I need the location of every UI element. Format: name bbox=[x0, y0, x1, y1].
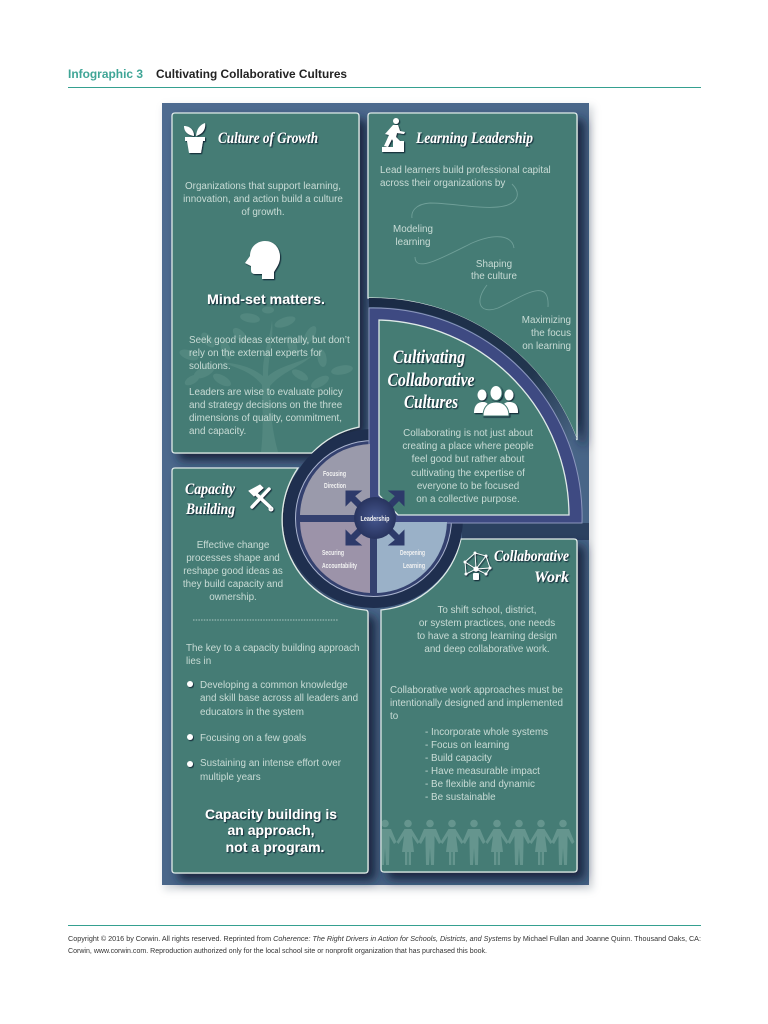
infographic background bbox=[162, 103, 589, 885]
bullet list bbox=[187, 680, 358, 783]
text: to shift school: or system practices, one needs bbox=[419, 618, 555, 629]
text: key to capacity building: lies in bbox=[186, 656, 211, 667]
text: modeling learning: learning bbox=[395, 237, 431, 248]
icon: plant bbox=[184, 123, 205, 153]
quadrant: focusing direction bbox=[300, 444, 370, 515]
text: effective change: ownership. bbox=[209, 592, 257, 603]
header bbox=[68, 67, 701, 88]
header label: Infographic 3 bbox=[68, 67, 143, 81]
list: design requirements: - Incorporate whole systems bbox=[425, 727, 548, 738]
text: collaborative work approaches: to bbox=[390, 711, 399, 722]
intro text: Organizations that support learning, bbox=[185, 181, 341, 192]
list: design requirements: - Have measurable impact bbox=[425, 766, 540, 777]
text: leaders are wise: and strategy decisions on the three bbox=[189, 400, 343, 411]
icon: head bbox=[245, 241, 280, 279]
text: seek good ideas: rely on the external experts for bbox=[189, 348, 323, 359]
text: maximizing the focus: Maximizing bbox=[522, 315, 571, 326]
text: effective change: processes shape and bbox=[186, 553, 280, 564]
text: shaping the culture: the culture bbox=[471, 271, 518, 282]
quadrant: focusing direction: Focusing bbox=[323, 471, 346, 478]
heading: cultivating collaborative cultures: Collaborative bbox=[388, 370, 475, 391]
text: collaborative work approaches: intentionally designed and implemented bbox=[390, 698, 563, 709]
text: maximizing the focus: the focus bbox=[531, 328, 571, 339]
text: collaborating is not just: feel good but rather about bbox=[412, 454, 525, 465]
callout: capacity building is an approach bbox=[205, 807, 337, 855]
squiggle connectors bbox=[412, 184, 548, 310]
circular leadership diagram bbox=[300, 444, 447, 593]
heading: collaborative work: Collaborative bbox=[494, 548, 569, 565]
panel: learning leadership bbox=[368, 113, 577, 440]
text: effective change: they build capacity and bbox=[183, 579, 283, 590]
panel: culture of growth bbox=[172, 113, 359, 453]
text: seek good ideas: solutions. bbox=[189, 361, 231, 372]
quadrant: securing accountability: Accountability bbox=[322, 563, 357, 570]
list: design requirements: - Focus on learning bbox=[425, 740, 509, 751]
text: effective change: reshape good ideas as bbox=[183, 566, 283, 577]
text: to shift school: and deep collaborative work. bbox=[424, 644, 550, 655]
arrows from hub bbox=[347, 492, 403, 544]
heading: culture of growth: Culture of Growth bbox=[218, 130, 318, 147]
callout: capacity building is an approach: not a program. bbox=[226, 840, 324, 855]
hub: leadership bbox=[354, 497, 396, 539]
text: maximizing the focus: on learning bbox=[522, 341, 571, 352]
intro text: innovation, and action build a culture bbox=[183, 194, 343, 205]
heading: collaborative work: Work bbox=[534, 569, 569, 586]
callout: capacity building is an approach: an approach, bbox=[228, 823, 314, 838]
text: lead learners: Lead learners build professional capital bbox=[380, 165, 551, 176]
bullet list: and skill base across all leaders and bbox=[200, 693, 358, 704]
dark arc band bbox=[369, 302, 572, 440]
bullet list: Sustaining an intense effort over bbox=[200, 758, 342, 769]
icon: tools bbox=[249, 485, 272, 510]
text: key to capacity building: The key to a capacity building approach bbox=[186, 643, 359, 654]
header title: Cultivating Collaborative Cultures bbox=[156, 67, 347, 81]
text: to shift school: to have a strong learning design bbox=[417, 631, 557, 642]
heading: collaborative work bbox=[494, 548, 569, 586]
callout: capacity building is an approach: Capacity building is bbox=[205, 807, 337, 822]
text: collaborating is not just: everyone to be focused bbox=[417, 481, 519, 492]
text: collaborating is not just: Collaborating is not just about bbox=[403, 428, 533, 439]
footer bbox=[68, 925, 701, 955]
quadrant: deepening learning bbox=[377, 522, 447, 593]
heading: cultivating collaborative cultures bbox=[388, 347, 475, 413]
text: effective change: Effective change bbox=[197, 540, 270, 551]
leadership ring bbox=[284, 429, 463, 608]
panel: cultivating collaborative cultures bbox=[369, 308, 582, 523]
quadrant: securing accountability bbox=[300, 522, 370, 593]
text: leaders are wise: dimensions of quality, commitment, bbox=[189, 413, 342, 424]
text: to shift school: To shift school, district, bbox=[437, 605, 537, 616]
heading: capacity building: Building bbox=[185, 501, 235, 518]
quadrant: securing accountability: Securing bbox=[322, 550, 344, 557]
heading: cultivating collaborative cultures: Cultivating bbox=[393, 347, 465, 368]
bullet list: educators in the system bbox=[200, 707, 304, 718]
heading: cultivating collaborative cultures: Cultures bbox=[404, 392, 458, 413]
text: leaders are wise: and capacity. bbox=[189, 426, 246, 437]
list: design requirements: - Build capacity bbox=[425, 753, 492, 764]
heading: capacity building: Capacity bbox=[185, 481, 236, 498]
text: collaborative work approaches: Collaborative work approaches must be bbox=[390, 685, 563, 696]
panel: capacity building bbox=[172, 468, 368, 873]
bullet list: Developing a common knowledge bbox=[200, 680, 348, 691]
icon: climbing figure bbox=[382, 118, 405, 152]
quadrant: deepening learning: Learning bbox=[403, 563, 425, 570]
tree watermark bbox=[178, 306, 354, 452]
text: lead learners: across their organizations by bbox=[380, 178, 505, 189]
bullet list: Focusing on a few goals bbox=[200, 733, 306, 744]
list: design requirements: - Be sustainable bbox=[425, 792, 496, 803]
callout: mind-set matters: Mind-set matters. bbox=[207, 292, 325, 307]
people chain watermark bbox=[374, 820, 574, 865]
heading: learning leadership: Learning Leadership bbox=[415, 130, 533, 147]
heading: capacity building bbox=[185, 481, 236, 518]
text: shaping the culture: Shaping bbox=[476, 259, 512, 270]
icon: network bbox=[464, 552, 492, 580]
text: collaborating is not just: creating a place where people bbox=[402, 441, 534, 452]
hub: leadership: Leadership bbox=[360, 516, 390, 523]
copyright text: Copyright © 2016 by Corwin. All rights reserved. Reprinted from Coherence: The Right Drivers in Action for Schools, Districts, and Systems by Michael Fullan and Joanne Quinn. Thousand Oaks, CA: bbox=[68, 936, 696, 943]
panel: collaborative work bbox=[374, 539, 577, 872]
quadrant: focusing direction: Direction bbox=[324, 483, 346, 490]
text: collaborating is not just: on a collective purpose. bbox=[416, 494, 520, 505]
bullet list: multiple years bbox=[200, 772, 261, 783]
quadrant: deepening learning: Deepening bbox=[400, 550, 425, 557]
text: collaborating is not just: cultivating the expertise of bbox=[411, 468, 525, 479]
text: leaders are wise: Leaders are wise to evaluate policy bbox=[189, 387, 343, 398]
copyright text: Corwin, www.corwin.com. Reproduction authorized only for the local school site or nonprofit organization that has purchased this book. bbox=[68, 948, 487, 955]
list: design requirements: - Be flexible and dynamic bbox=[425, 779, 535, 790]
icon: group of people bbox=[474, 386, 518, 416]
intro text: of growth. bbox=[241, 207, 285, 218]
text: modeling learning: Modeling bbox=[393, 224, 433, 235]
text: seek good ideas: Seek good ideas externally, but don’t bbox=[189, 335, 350, 346]
